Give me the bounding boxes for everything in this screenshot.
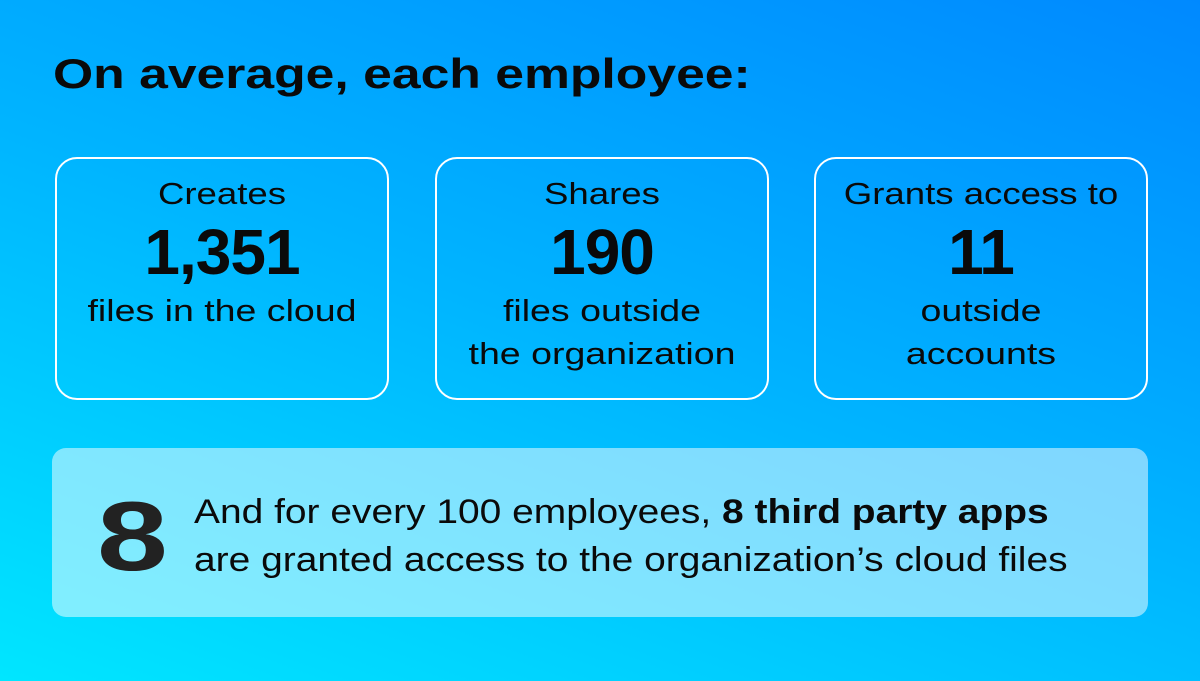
big number 8: 8 <box>97 481 168 591</box>
panel: shares <box>435 157 769 400</box>
panel: creates: files in the cloud <box>88 293 356 328</box>
text block: third party apps: And for every 100 employees, 8 third party apps <box>194 493 1049 531</box>
panel: grants access: Grants access to <box>844 176 1118 211</box>
panel: shares: the organization <box>469 336 735 371</box>
title: On average, each employee: <box>53 50 751 97</box>
panel: grants access <box>814 157 1148 400</box>
panel: grants access: outside <box>921 293 1041 328</box>
text block: third party apps: are granted access to the organization’s cloud files <box>194 541 1068 579</box>
panel: shares: files outside <box>503 293 701 328</box>
panel: shares: 190 <box>550 216 654 288</box>
text block: third party apps <box>194 493 1068 579</box>
panel: creates: Creates <box>158 176 286 211</box>
panel: shares: Shares <box>544 176 660 211</box>
panel: third party apps <box>52 448 1148 617</box>
panel: grants access: accounts <box>906 336 1056 371</box>
panel: creates: 1,351 <box>144 216 300 288</box>
panel: grants access: 11 <box>948 216 1014 288</box>
panel: creates <box>55 157 389 400</box>
